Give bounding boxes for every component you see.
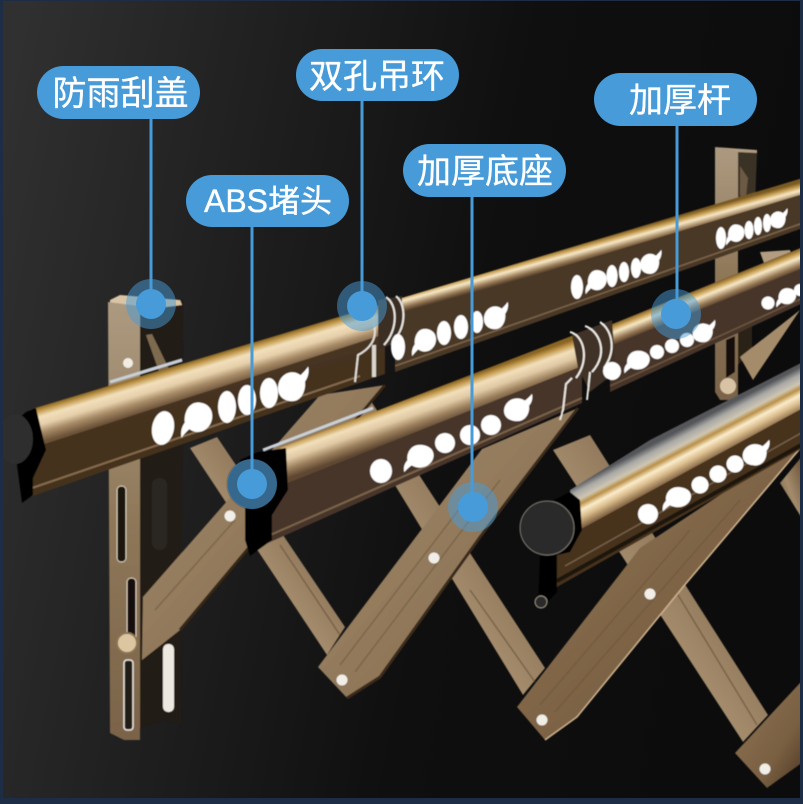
arm rivets [117,510,770,774]
rail 2: right section [610,247,803,392]
callout: 双孔吊环: 双孔吊环 [309,58,445,96]
callout: 加厚杆: 加厚杆 [629,82,731,120]
callout: 加厚底座 [403,144,566,532]
right wall bracket [715,147,757,400]
callout: 防雨刮盖: 防雨刮盖 [52,75,188,113]
rail 1: end cap [0,408,46,503]
rail 2: end cap [227,448,288,556]
callout: 双孔吊环 [296,49,459,331]
rail 3: hanger holes [638,440,770,524]
rail 2: joint collar and hooks [560,320,616,420]
left wall bracket [108,295,183,740]
scissor arm: narrow bars behind [190,395,803,742]
rail 3: end cap and hook [520,492,582,608]
callout: ABS堵头 [186,175,349,509]
scissor arm: wide bars in front [142,250,803,788]
callout: 加厚底座: 加厚底座 [417,153,553,191]
rail 1: left section [30,303,385,497]
rail 2: left section [263,332,582,543]
rail 3 [557,362,803,587]
callout: 防雨刮盖 [37,66,200,329]
rail 1: right section [395,178,803,372]
rail 1: hanger holes [149,208,788,447]
rail 2: hanger holes [370,284,803,483]
drying rack product illustration [0,147,803,788]
callout: ABS堵头: ABS堵头 [204,183,332,219]
rail 1: joint collar and hooks [355,296,403,382]
callout: 加厚杆 [594,73,757,339]
